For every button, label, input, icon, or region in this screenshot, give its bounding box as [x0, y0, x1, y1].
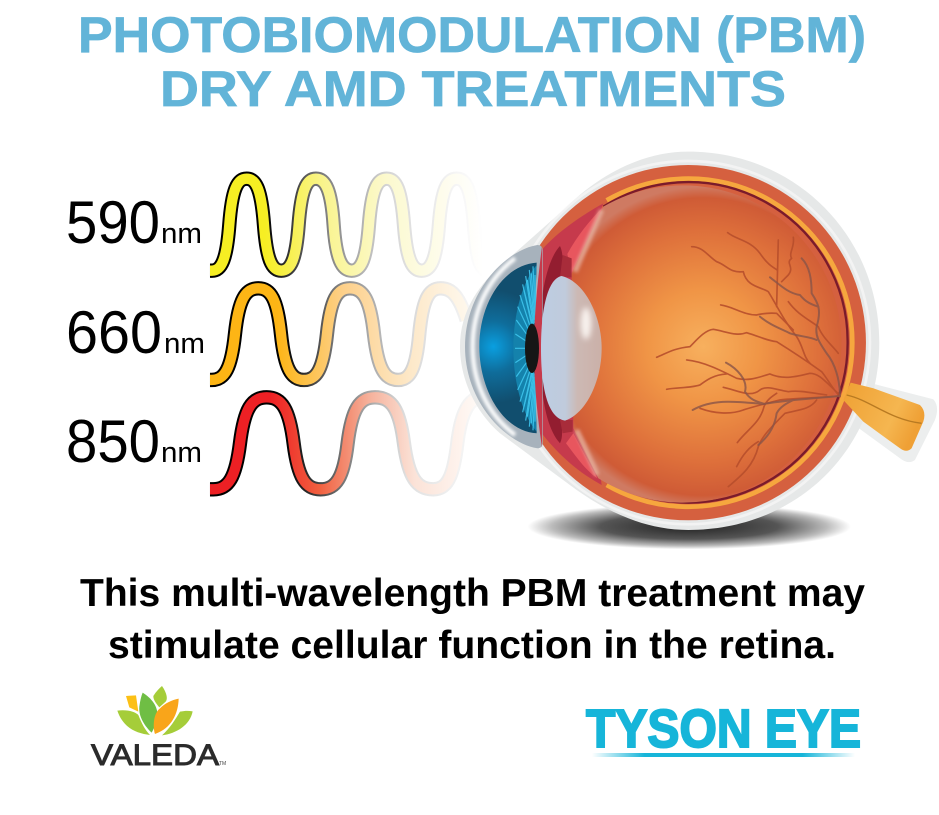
- lens: [541, 276, 602, 421]
- wave: 850nm red: [210, 397, 478, 489]
- ciliary highlight lower: [566, 433, 597, 478]
- illustration: eye anatomy: [460, 152, 937, 549]
- iris: [479, 263, 537, 433]
- title: [78, 7, 866, 117]
- wordmark: VALEDA: [91, 739, 219, 772]
- logo: Valeda: [91, 686, 226, 772]
- choroid orange arc: [607, 179, 852, 507]
- outer sclera halo: [460, 152, 879, 530]
- dark overlapping vessels: [693, 258, 840, 445]
- lotus mark: [117, 686, 193, 735]
- ciliary highlight upper: [567, 207, 603, 273]
- ground shadow: [528, 504, 851, 549]
- wave: 590nm yellow: [210, 179, 487, 271]
- caption: [80, 572, 865, 667]
- retina dark arc: [600, 182, 848, 503]
- title: DRY AMD TREATMENTS: [160, 61, 786, 117]
- label: 660nm: nm: [164, 328, 205, 360]
- underline: [592, 753, 855, 757]
- label: 590nm: 590: [66, 189, 160, 256]
- label: 850nm: 850: [66, 408, 160, 475]
- label: 660nm: 660: [66, 299, 162, 366]
- vitreous: [572, 185, 841, 503]
- logo: Tyson Eye: TYSON EYE: [586, 699, 861, 759]
- sclera inner rim: [507, 161, 870, 524]
- ciliary front sliver: [534, 246, 542, 447]
- logo: Valeda: TM: [219, 761, 226, 767]
- label: 850nm: nm: [161, 437, 202, 469]
- lens highlight: [581, 307, 591, 339]
- ciliary frill upper: [560, 255, 572, 277]
- optic nerve halo: [857, 382, 937, 462]
- iris fibres: [515, 266, 536, 430]
- vitreous pale front edge: [575, 210, 602, 475]
- iris fibres band: [513, 265, 537, 432]
- globe wall: [511, 165, 866, 520]
- retinal vessels: [657, 233, 840, 487]
- optic nerve core line: [847, 395, 922, 423]
- ciliary dark band: [540, 246, 563, 443]
- wave: 660nm orange: [210, 288, 467, 380]
- caption: stimulate cellular function in the retina.: [108, 624, 836, 667]
- cornea shell: [465, 245, 543, 448]
- optic nerve: [843, 383, 924, 451]
- pupil: [525, 324, 539, 373]
- cornea white band: [473, 258, 515, 435]
- title: PHOTOBIOMODULATION (PBM): [78, 7, 866, 63]
- ciliary frill lower: [560, 420, 573, 433]
- caption: This multi-wavelength PBM treatment may: [80, 572, 865, 615]
- label: 590nm: nm: [161, 218, 202, 250]
- ciliary body: [532, 203, 603, 485]
